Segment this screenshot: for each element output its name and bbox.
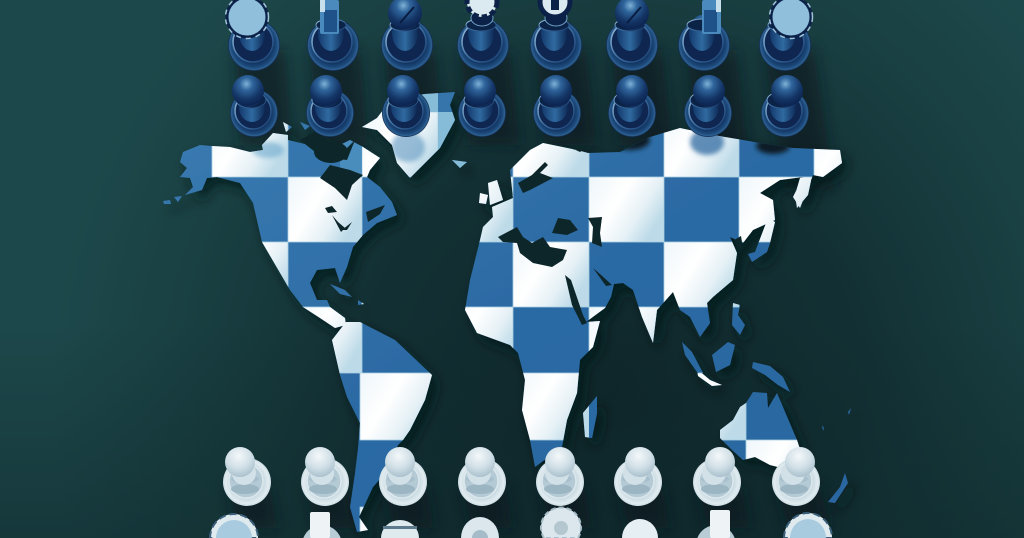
white queen [461, 517, 499, 538]
black queen [457, 0, 509, 71]
white pieces: back row [210, 507, 832, 538]
black pawns row [230, 75, 809, 137]
white king [541, 507, 581, 538]
white rook [210, 514, 258, 538]
black king [530, 0, 582, 71]
black bishop [606, 0, 658, 71]
black rook [759, 0, 812, 71]
black pieces: back row [226, 0, 812, 71]
white knight [303, 512, 341, 538]
white bishop [381, 520, 419, 538]
black bishop [381, 0, 433, 71]
white bishop [622, 519, 658, 538]
white pawns row [223, 447, 820, 506]
piece cast shadows [228, 50, 835, 528]
white rook [784, 513, 832, 538]
black knight [307, 0, 359, 71]
world map: checkerboard continents [163, 92, 854, 538]
seas and lakes [300, 130, 743, 325]
pawn shadows on map [252, 129, 790, 162]
black rook [226, 0, 280, 71]
black knight [678, 0, 730, 71]
white knight [697, 510, 735, 538]
